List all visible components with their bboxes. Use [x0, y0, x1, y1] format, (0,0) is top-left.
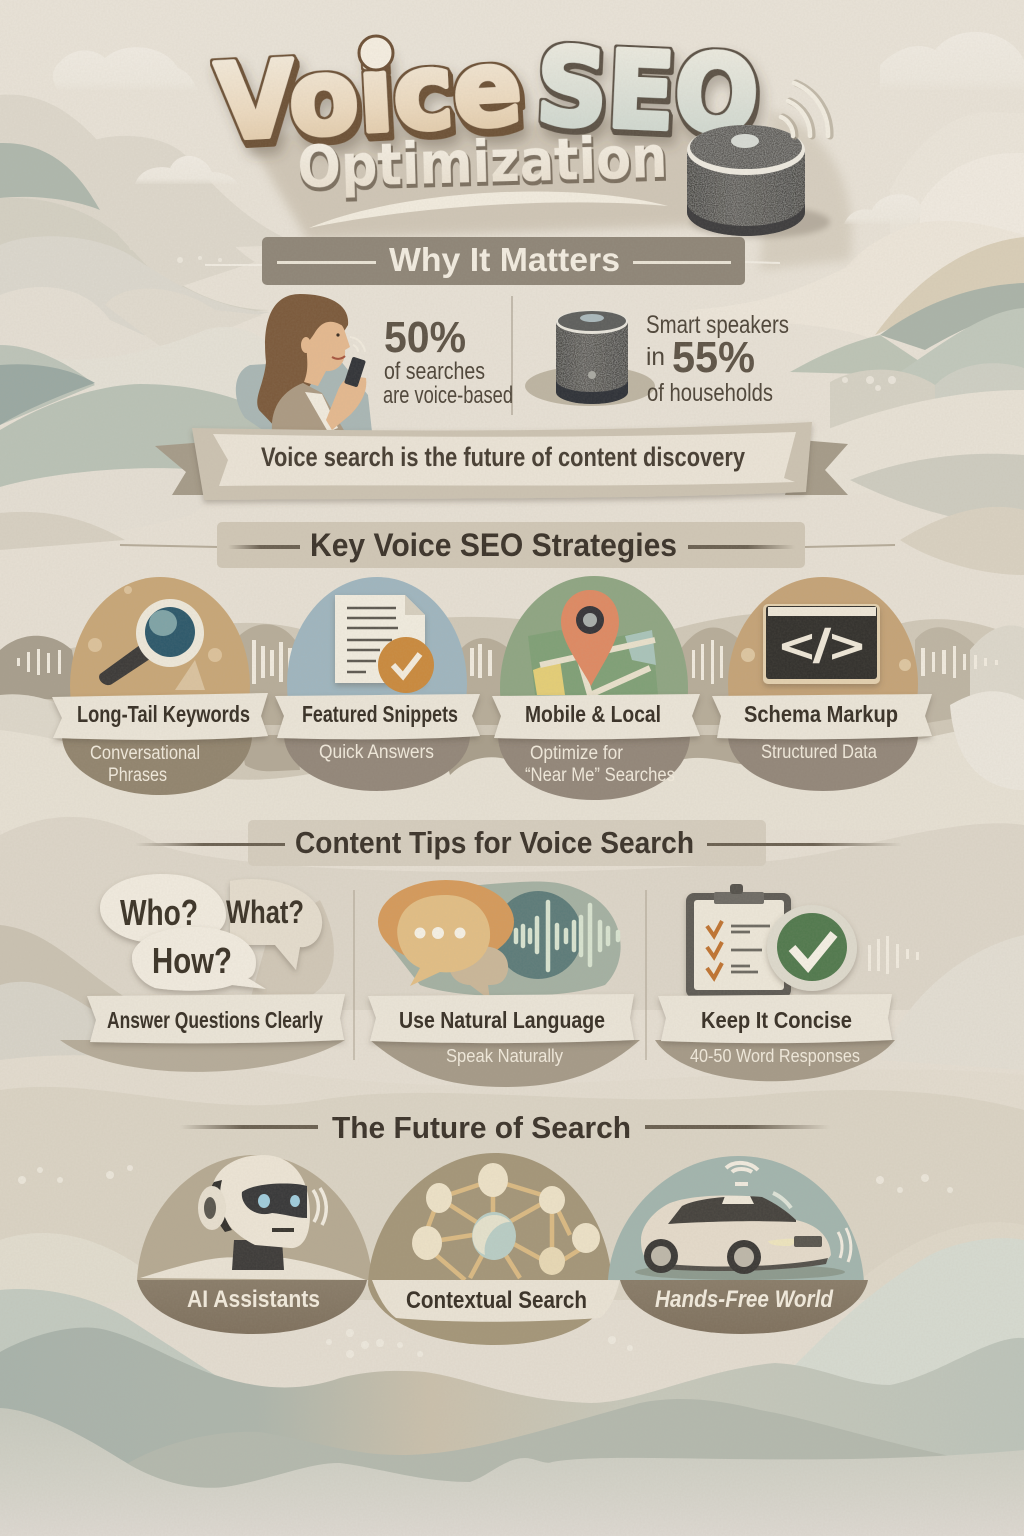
section header: The Future of Search [180, 1110, 830, 1145]
panel: Long-Tail Keywords: Phrases [108, 765, 167, 786]
icon: question speech bubbles: What? [226, 894, 304, 930]
icon: document with check badge [335, 595, 434, 693]
ribbon label [492, 694, 700, 739]
panel: Schema Markup: Schema Markup [744, 701, 898, 727]
section header: Key Voice SEO Strategies: Key Voice SEO Strategies [310, 527, 677, 563]
panel: Contextual Search: Contextual Search [406, 1287, 587, 1314]
section header: The Future of Search: The Future of Search [332, 1110, 631, 1145]
stat: Smart speakers in 55% of households: 55% [672, 333, 755, 382]
stat: Smart speakers in 55% of households: Smart speakers [646, 311, 789, 339]
panel: Long-Tail Keywords [52, 577, 268, 795]
ribbon label [87, 994, 345, 1043]
panel: Long-Tail Keywords: Conversational [90, 743, 200, 764]
icon: robot head [140, 1155, 366, 1280]
panel: Answer Questions Clearly [60, 874, 345, 1072]
ribbon label [275, 694, 480, 739]
panel: AI Assistants: AI Assistants [187, 1286, 320, 1313]
panel: Keep It Concise [655, 884, 919, 1081]
bowl label [620, 1280, 868, 1334]
tip dividers [354, 890, 646, 1060]
panel: Long-Tail Keywords: Long-Tail Keywords [77, 701, 250, 727]
ribbon label [52, 693, 268, 740]
stat: 50% of searches are voice-based: of searches [384, 358, 485, 385]
panel: Keep It Concise: 40-50 Word Responses [690, 1046, 860, 1066]
stat: 50% of searches are voice-based [383, 313, 513, 409]
illustration: woman speaking into phone [236, 294, 372, 435]
title: Voice SEO Optimization [213, 25, 761, 228]
panel: Featured Snippets: Featured Snippets [302, 701, 458, 727]
icon: smart speaker with sound waves [687, 83, 830, 238]
title swoosh [309, 192, 668, 228]
panel: Answer Questions Clearly: Answer Questions Clearly [107, 1007, 323, 1033]
icon: map with location pin [528, 590, 658, 695]
panel: AI Assistants [137, 1155, 372, 1334]
section header: Content Tips for Voice Search: Content Tips for Voice Search [295, 825, 694, 860]
icon: question speech bubbles: Who? [120, 892, 198, 933]
stat: Smart speakers in 55% of households: in [646, 343, 665, 371]
icon: checklist clipboard with check badge [686, 884, 857, 998]
title word: SEO: SEO [534, 25, 761, 158]
panel: Mobile &amp; Local: Optimize for [530, 743, 624, 764]
stat divider [511, 296, 513, 415]
title shadow plate [245, 115, 715, 240]
panel: Mobile &amp; Local: Mobile & Local [525, 701, 661, 727]
waveforms between strategy circles [17, 640, 998, 684]
title word: Optimization: Optimization [296, 123, 668, 201]
ribbon: key message [155, 422, 848, 500]
icon: magnifying glass [99, 599, 204, 685]
panel: Use Natural Language: Speak Naturally [446, 1046, 563, 1066]
panel: Featured Snippets [275, 577, 480, 791]
section header: Key Voice SEO Strategies [120, 522, 895, 568]
ribbon label [712, 694, 932, 739]
icon: tall smart speaker [525, 310, 655, 406]
icon: self-driving car [635, 1163, 851, 1280]
icon: network graph [412, 1163, 600, 1280]
bowl label [137, 1280, 367, 1334]
ribbon: key message: Voice search is the future of content discovery [261, 442, 745, 472]
panel: Use Natural Language: Use Natural Language [399, 1007, 605, 1033]
panel: Schema Markup [712, 577, 932, 791]
panel: Hands-Free World [608, 1156, 868, 1334]
stat: 50% of searches are voice-based: 50% [384, 313, 466, 362]
title word: Voice: Voice [213, 26, 525, 164]
stat: 50% of searches are voice-based: are voice-based [383, 382, 513, 409]
panel: Featured Snippets: Quick Answers [319, 742, 434, 763]
stat: Smart speakers in 55% of households [646, 311, 789, 407]
panel: Contextual Search [368, 1153, 620, 1345]
title letter dot [359, 36, 393, 70]
panel: Mobile &amp; Local: “Near Me” Searches [525, 765, 675, 786]
panel: Schema Markup: Structured Data [761, 742, 877, 763]
ribbon label [658, 994, 892, 1043]
icon: code window: </> [780, 620, 864, 672]
stat: Smart speakers in 55% of households: of households [647, 379, 773, 407]
waveform [868, 936, 919, 974]
panel: Hands-Free World: Hands-Free World [655, 1286, 834, 1313]
panel: Mobile &amp; Local [492, 576, 700, 800]
icon: question speech bubbles: How? [152, 940, 232, 981]
icon: question speech bubbles [100, 874, 322, 991]
ribbon label [372, 1280, 620, 1322]
icon: chat bubbles and voice wave [378, 880, 621, 1000]
section header: Content Tips for Voice Search [135, 820, 902, 866]
icon: code window [763, 604, 880, 684]
panel: Use Natural Language [368, 880, 640, 1087]
section header: Why It Matters [262, 237, 745, 285]
ribbon label [368, 994, 634, 1043]
panel: Keep It Concise: Keep It Concise [701, 1007, 852, 1033]
section header: Why It Matters: Why It Matters [389, 241, 620, 278]
